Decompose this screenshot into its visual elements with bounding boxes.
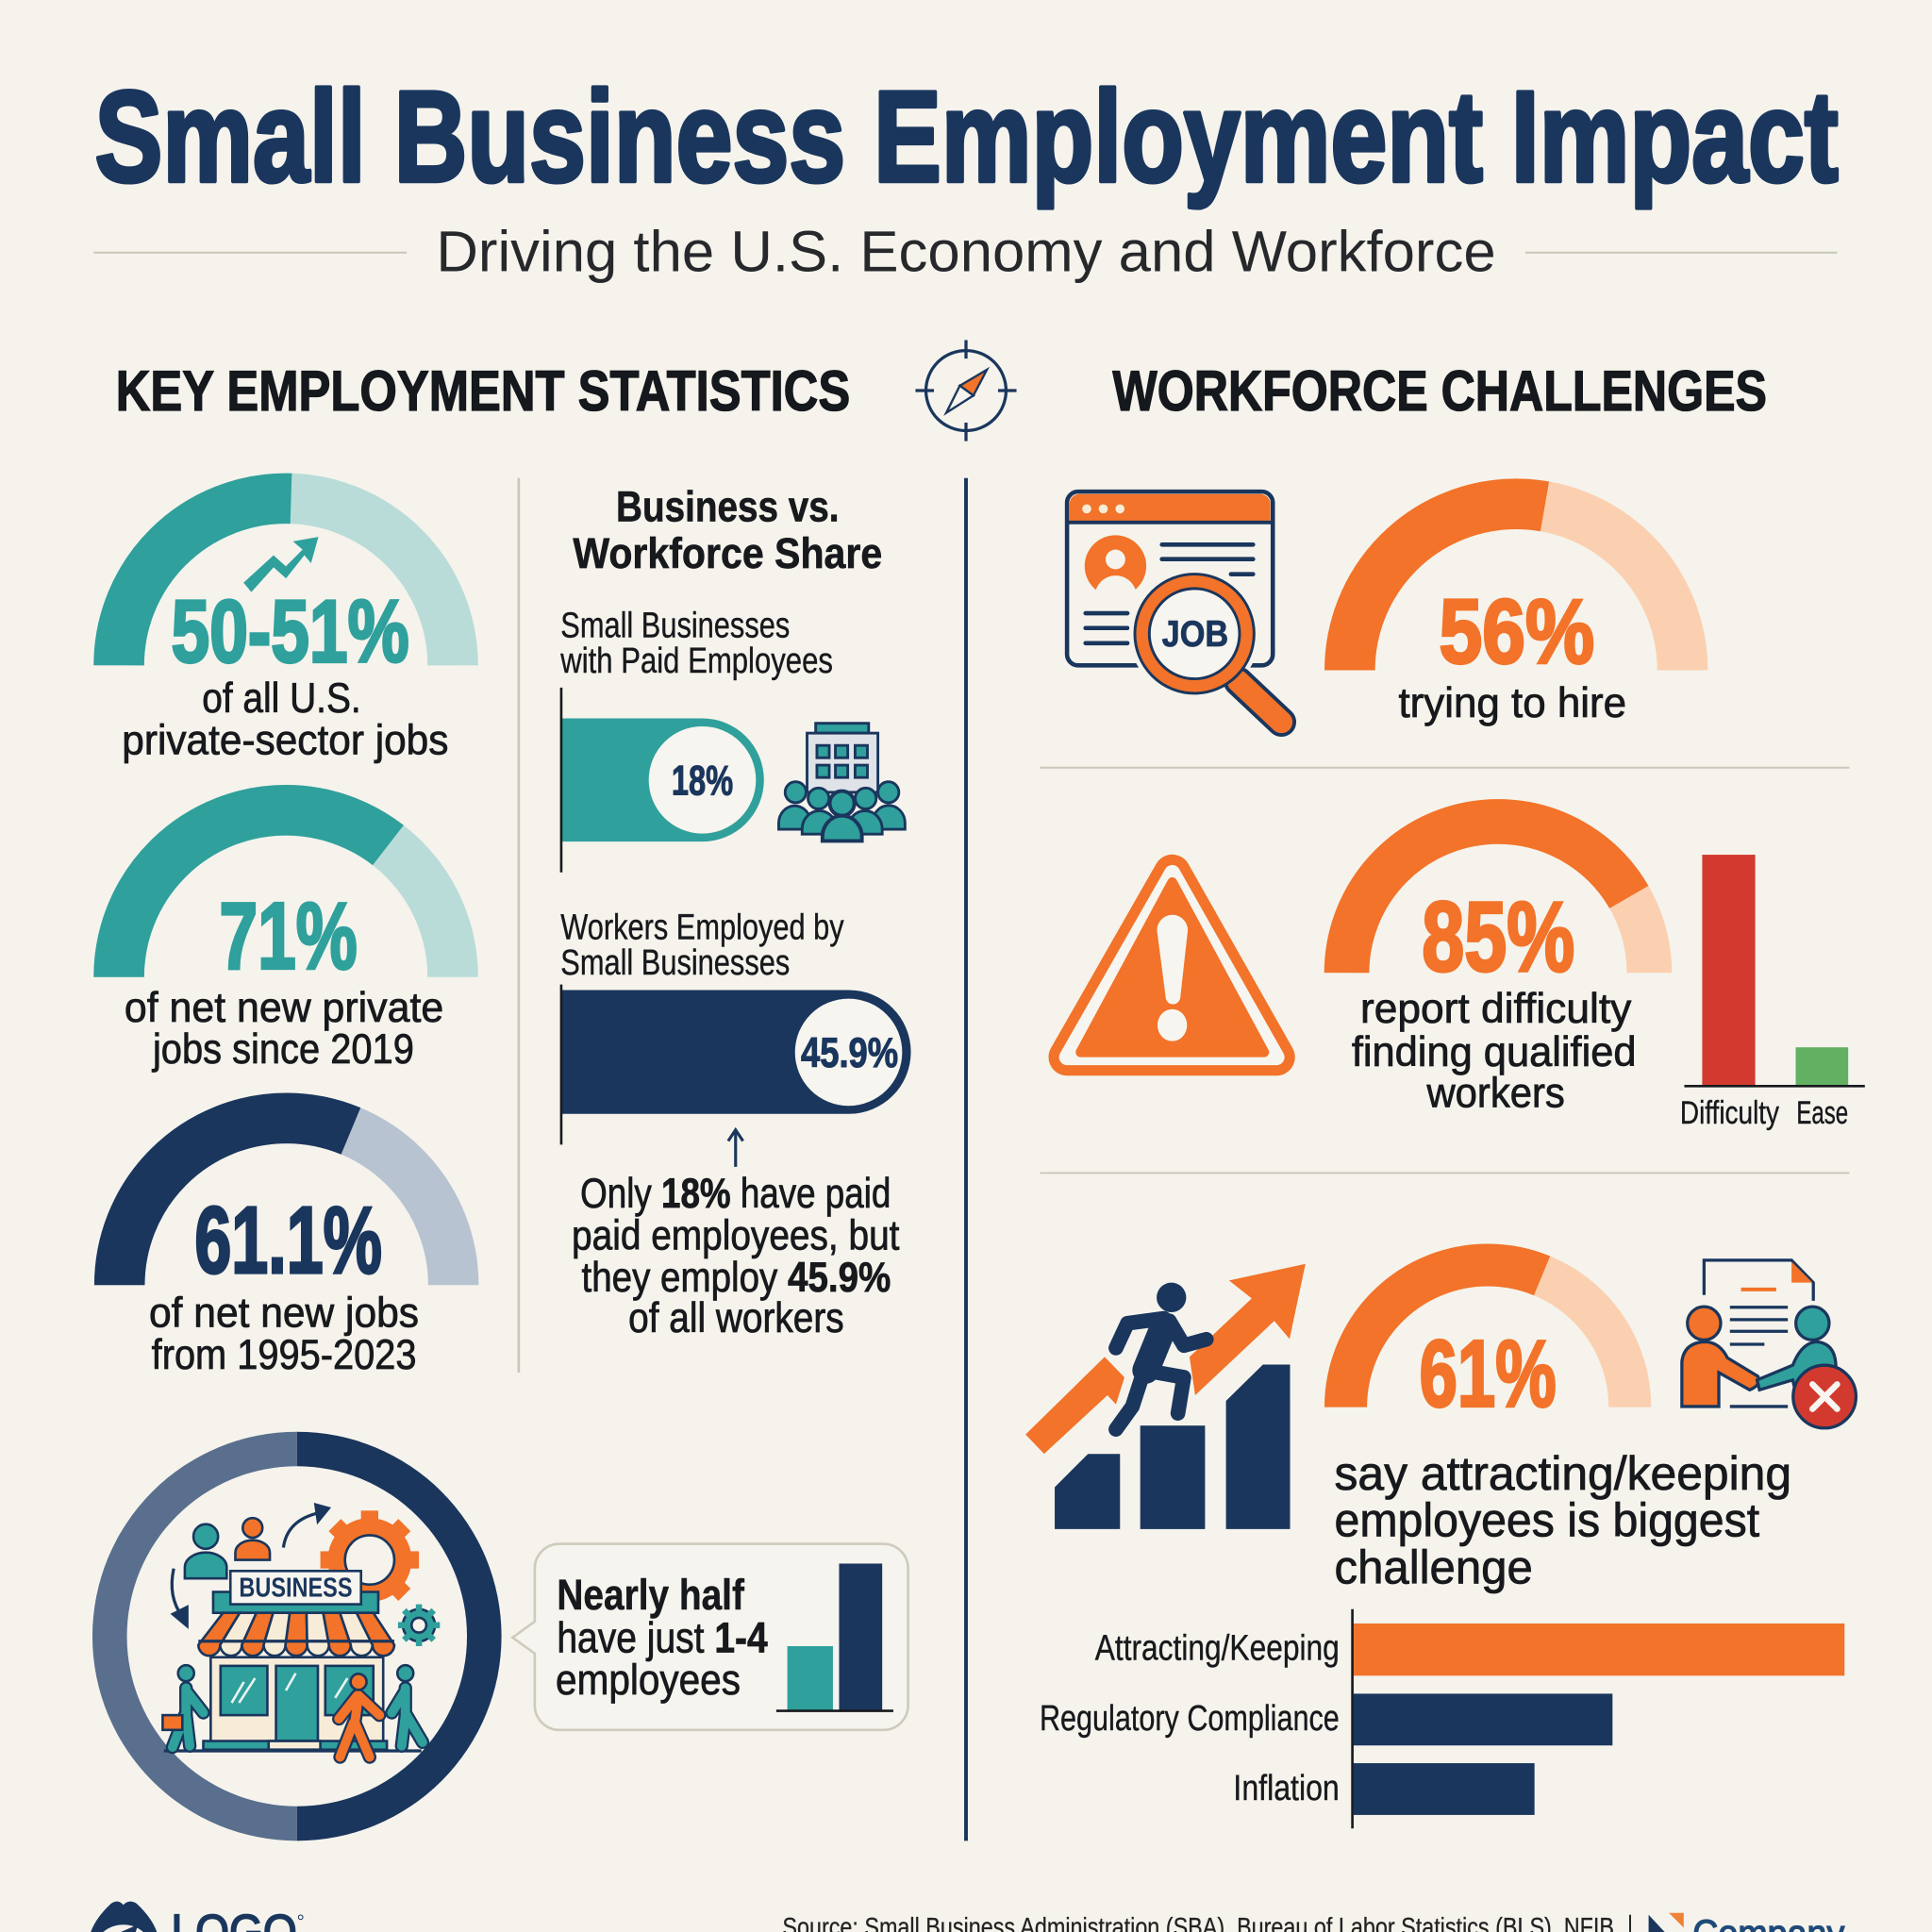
row: difficulty finding workers [1067, 822, 1865, 1131]
gauge: 56% [1350, 504, 1683, 726]
footer [89, 1902, 1845, 1932]
label: small businesses with paid employees: Small Businesses [560, 606, 790, 645]
label: workers employed by small businesses [560, 908, 844, 983]
gauge: 61.1%: of net new jobs [149, 1291, 419, 1337]
text: only 18% have paid employees: Only 18% have paid [580, 1171, 891, 1217]
text: say attracting/keeping [1335, 1447, 1791, 1593]
bar: 45.9% [561, 985, 911, 1144]
logo [89, 1902, 303, 1932]
heading: business vs workforce share: Business vs. [616, 482, 839, 530]
gauge: 71%: of net new private [125, 985, 443, 1031]
gauge: 85%: report difficulty [1360, 986, 1632, 1032]
chart: biggest challenges [1040, 1609, 1844, 1828]
panel: business vs workforce share [559, 482, 911, 1341]
text: say attracting/keeping: employees is biggest [1335, 1494, 1759, 1547]
heading: key employment statistics: KEY EMPLOYMENT STATISTICS [116, 359, 850, 423]
gauge: 50-51%: 50-51% [172, 581, 409, 680]
heading: business vs workforce share: Workforce Share [573, 529, 882, 577]
gauge: 50-51%: of all U.S. [202, 675, 361, 722]
chart: difficulty vs ease: Ease [1796, 1095, 1848, 1131]
arrow: up [728, 1130, 743, 1167]
chart: biggest challenges: Regulatory Compliance [1040, 1699, 1340, 1739]
subtitle: Driving the U.S. Economy and Workforce [436, 219, 1496, 284]
icon: warning triangle [1067, 873, 1276, 1058]
chart: difficulty vs ease [1680, 855, 1865, 1131]
label: workers employed by small businesses: Workers Employed by [560, 908, 844, 947]
icon: job search window: JOB [1162, 614, 1228, 655]
gauge: 50-51% [119, 498, 453, 763]
label: small businesses with paid employees: with Paid Employees [559, 641, 833, 681]
bar: 18% [561, 688, 764, 873]
ring [92, 1432, 502, 1840]
callout: nearly half [512, 1544, 908, 1730]
icon: people and cycle arrows [172, 1505, 329, 1626]
gauge: 61.1%: 61.1% [194, 1188, 382, 1293]
callout: nearly half: Nearly half [557, 1571, 745, 1619]
heading: workforce challenges: WORKFORCE CHALLENGES [1112, 359, 1767, 423]
icon: building and people [778, 724, 905, 841]
chart: difficulty vs ease: Difficulty [1680, 1095, 1779, 1131]
text: say attracting/keeping: say attracting/keeping [1335, 1447, 1791, 1500]
gauge: 71% [119, 810, 453, 1073]
building [204, 1592, 387, 1750]
callout: nearly half: have just 1-4 [557, 1614, 768, 1662]
gauge: 71%: jobs since 2019 [151, 1026, 414, 1073]
awning [198, 1613, 394, 1656]
panel: key employment statistics gauges [119, 498, 454, 1378]
gauge: 61.1%: from 1995-2023 [152, 1332, 416, 1378]
text: only 18% have paid employees: they employ 45.9% [581, 1255, 891, 1301]
gauge: 61.1% [120, 1118, 454, 1378]
gauge: 85%: 85% [1422, 882, 1574, 992]
heading: business vs workforce share [573, 482, 882, 577]
bar: 18%: 18% [672, 758, 733, 804]
icon: large gear [321, 1510, 419, 1609]
row: trying to hire [1067, 491, 1683, 726]
chart: biggest challenges: Attracting/Keeping [1095, 1628, 1340, 1668]
bar: 45.9%: 45.9% [801, 1030, 898, 1076]
panel: workforce challenges [1025, 491, 1865, 1828]
icon: person climbing bars [1025, 1264, 1306, 1529]
icon: small gear [398, 1605, 440, 1646]
icon: handshake with document [1682, 1260, 1856, 1428]
icon: storefront [162, 1505, 440, 1757]
icon: walking people [162, 1665, 423, 1757]
gauge: 56%: 56% [1440, 582, 1594, 683]
sign: business: BUSINESS [239, 1574, 353, 1604]
gauge: 56%: trying to hire [1398, 680, 1626, 726]
text: only 18% have paid employees: paid employees, but [572, 1212, 900, 1258]
gauge: 61% [1346, 1265, 1630, 1426]
gauge: 50-51%: private-sector jobs [122, 717, 448, 763]
gauge: 61%: 61% [1420, 1321, 1557, 1426]
gauge: 85%: workers [1426, 1071, 1565, 1117]
gauge: 85% [1347, 822, 1649, 1117]
mini bar chart [776, 1563, 893, 1711]
callout: nearly half: employees [556, 1656, 741, 1704]
gauge: 85%: finding qualified [1352, 1029, 1637, 1075]
gauge: 71%: 71% [219, 884, 358, 990]
panel: storefront ring [92, 1432, 908, 1840]
label: small businesses with paid employees [559, 606, 833, 681]
label: workers employed by small businesses: Small Businesses [560, 943, 790, 983]
icon: compass [915, 340, 1017, 441]
text: only 18% have paid employees: of all workers [628, 1295, 844, 1341]
text: say attracting/keeping: challenge [1335, 1541, 1533, 1593]
row: attracting and keeping employees [1025, 1260, 1856, 1828]
text: only 18% have paid employees [572, 1171, 900, 1341]
chart: biggest challenges: Inflation [1233, 1769, 1340, 1808]
icon: job search window [1067, 491, 1281, 722]
